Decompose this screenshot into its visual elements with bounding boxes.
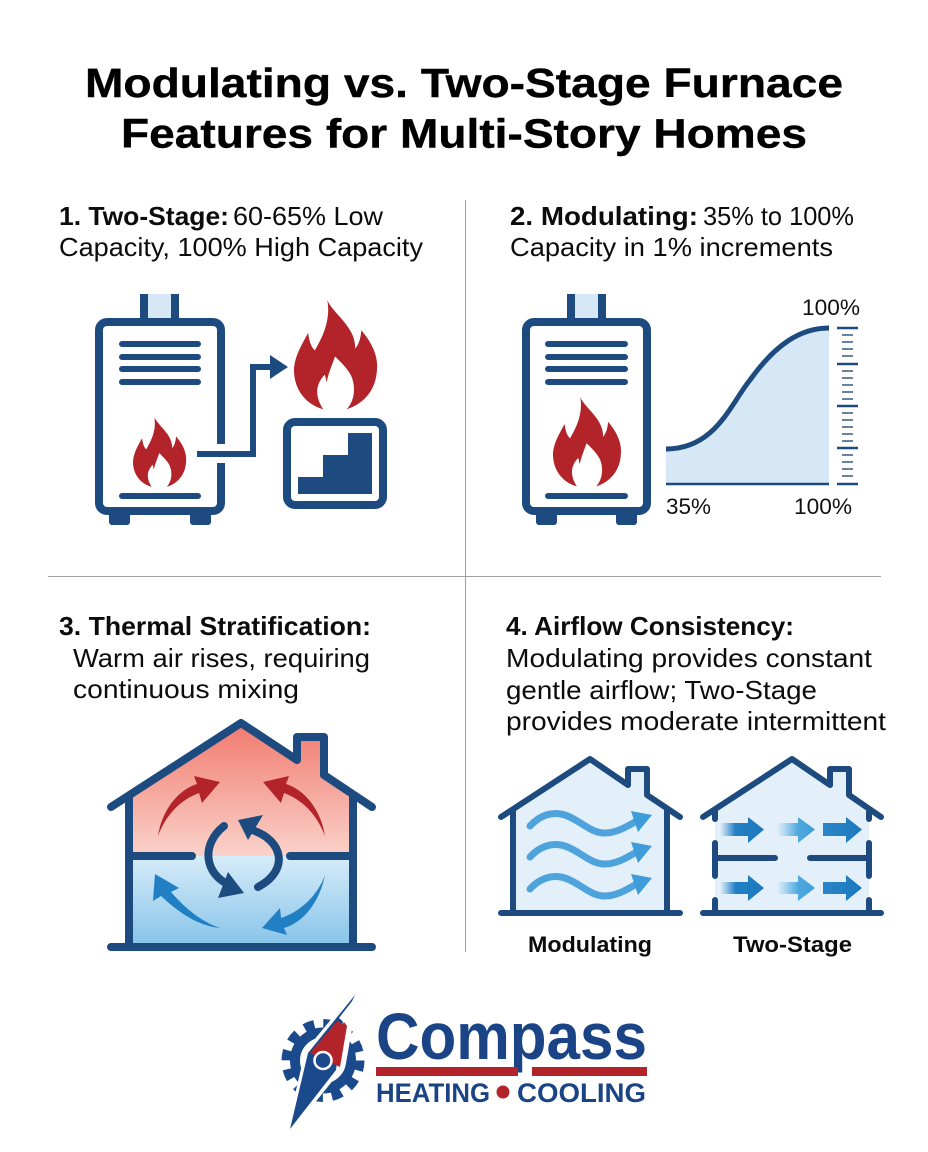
- heading: thermal stratification: [59, 611, 371, 704]
- heading: modulating: Capacity in 1% increments: [510, 232, 833, 262]
- heading: airflow consistency: gentle airflow; Two-Stage: [506, 675, 817, 705]
- title: [85, 60, 843, 156]
- chart: modulating capacity curve: 100%: [794, 494, 852, 519]
- heading: two-stage: Capacity, 100% High Capacity: [59, 232, 423, 262]
- icon: modulating furnace: [526, 294, 647, 525]
- chart: modulating capacity curve: 100%: [802, 295, 860, 320]
- icon: house with circulating air: [111, 723, 372, 947]
- label: two-stage: Two-Stage: [733, 932, 852, 957]
- wordmark: cooling: COOLING: [517, 1078, 646, 1108]
- icon: two-stage furnace: [99, 294, 227, 525]
- panel: two-stage: [59, 201, 423, 525]
- arrows: mixing cycle: [208, 815, 279, 898]
- heading: thermal stratification: continuous mixing: [73, 674, 299, 704]
- label: modulating: Modulating: [528, 932, 652, 957]
- title: Features for Multi-Story Homes: [121, 110, 807, 156]
- heading: airflow consistency: provides moderate intermittent: [506, 706, 887, 736]
- panel: airflow consistency: [501, 611, 887, 957]
- chart: modulating capacity curve: [666, 295, 860, 519]
- icon: modulating airflow house: [501, 759, 680, 913]
- icon: two-stage airflow house: [703, 759, 881, 913]
- icon: stepped capacity box: [287, 422, 383, 505]
- heading: two-stage: 60-65% Low: [233, 201, 383, 231]
- panel: modulating: [510, 201, 860, 525]
- arrow: low to high: [197, 355, 288, 454]
- title: Modulating vs. Two-Stage Furnace: [85, 60, 843, 106]
- logo: compass heating and cooling: [287, 995, 647, 1129]
- heading: airflow consistency: Modulating provides constant: [506, 643, 873, 673]
- heading: modulating: 35% to 100%: [703, 201, 854, 231]
- heading: thermal stratification: 3. Thermal Stratification:: [59, 611, 371, 641]
- icon: large flame: [294, 300, 377, 409]
- arrows: cool air: [153, 874, 325, 935]
- wordmark: heating: HEATING: [376, 1078, 490, 1108]
- heading: airflow consistency: [506, 611, 887, 736]
- panel: thermal stratification: [59, 611, 372, 947]
- heading: modulating: [510, 201, 854, 262]
- heading: two-stage: 1. Two-Stage:: [59, 201, 229, 231]
- arrows: warm air: [158, 776, 325, 836]
- heading: thermal stratification: Warm air rises, requiring: [73, 643, 370, 673]
- heading: two-stage: [59, 201, 423, 262]
- heading: modulating: 2. Modulating:: [510, 201, 698, 231]
- wordmark: compass: Compass: [376, 999, 647, 1073]
- icon: compass gear: [287, 995, 359, 1129]
- chart: modulating capacity curve: 35%: [666, 494, 711, 519]
- heading: airflow consistency: 4. Airflow Consistency:: [506, 611, 794, 641]
